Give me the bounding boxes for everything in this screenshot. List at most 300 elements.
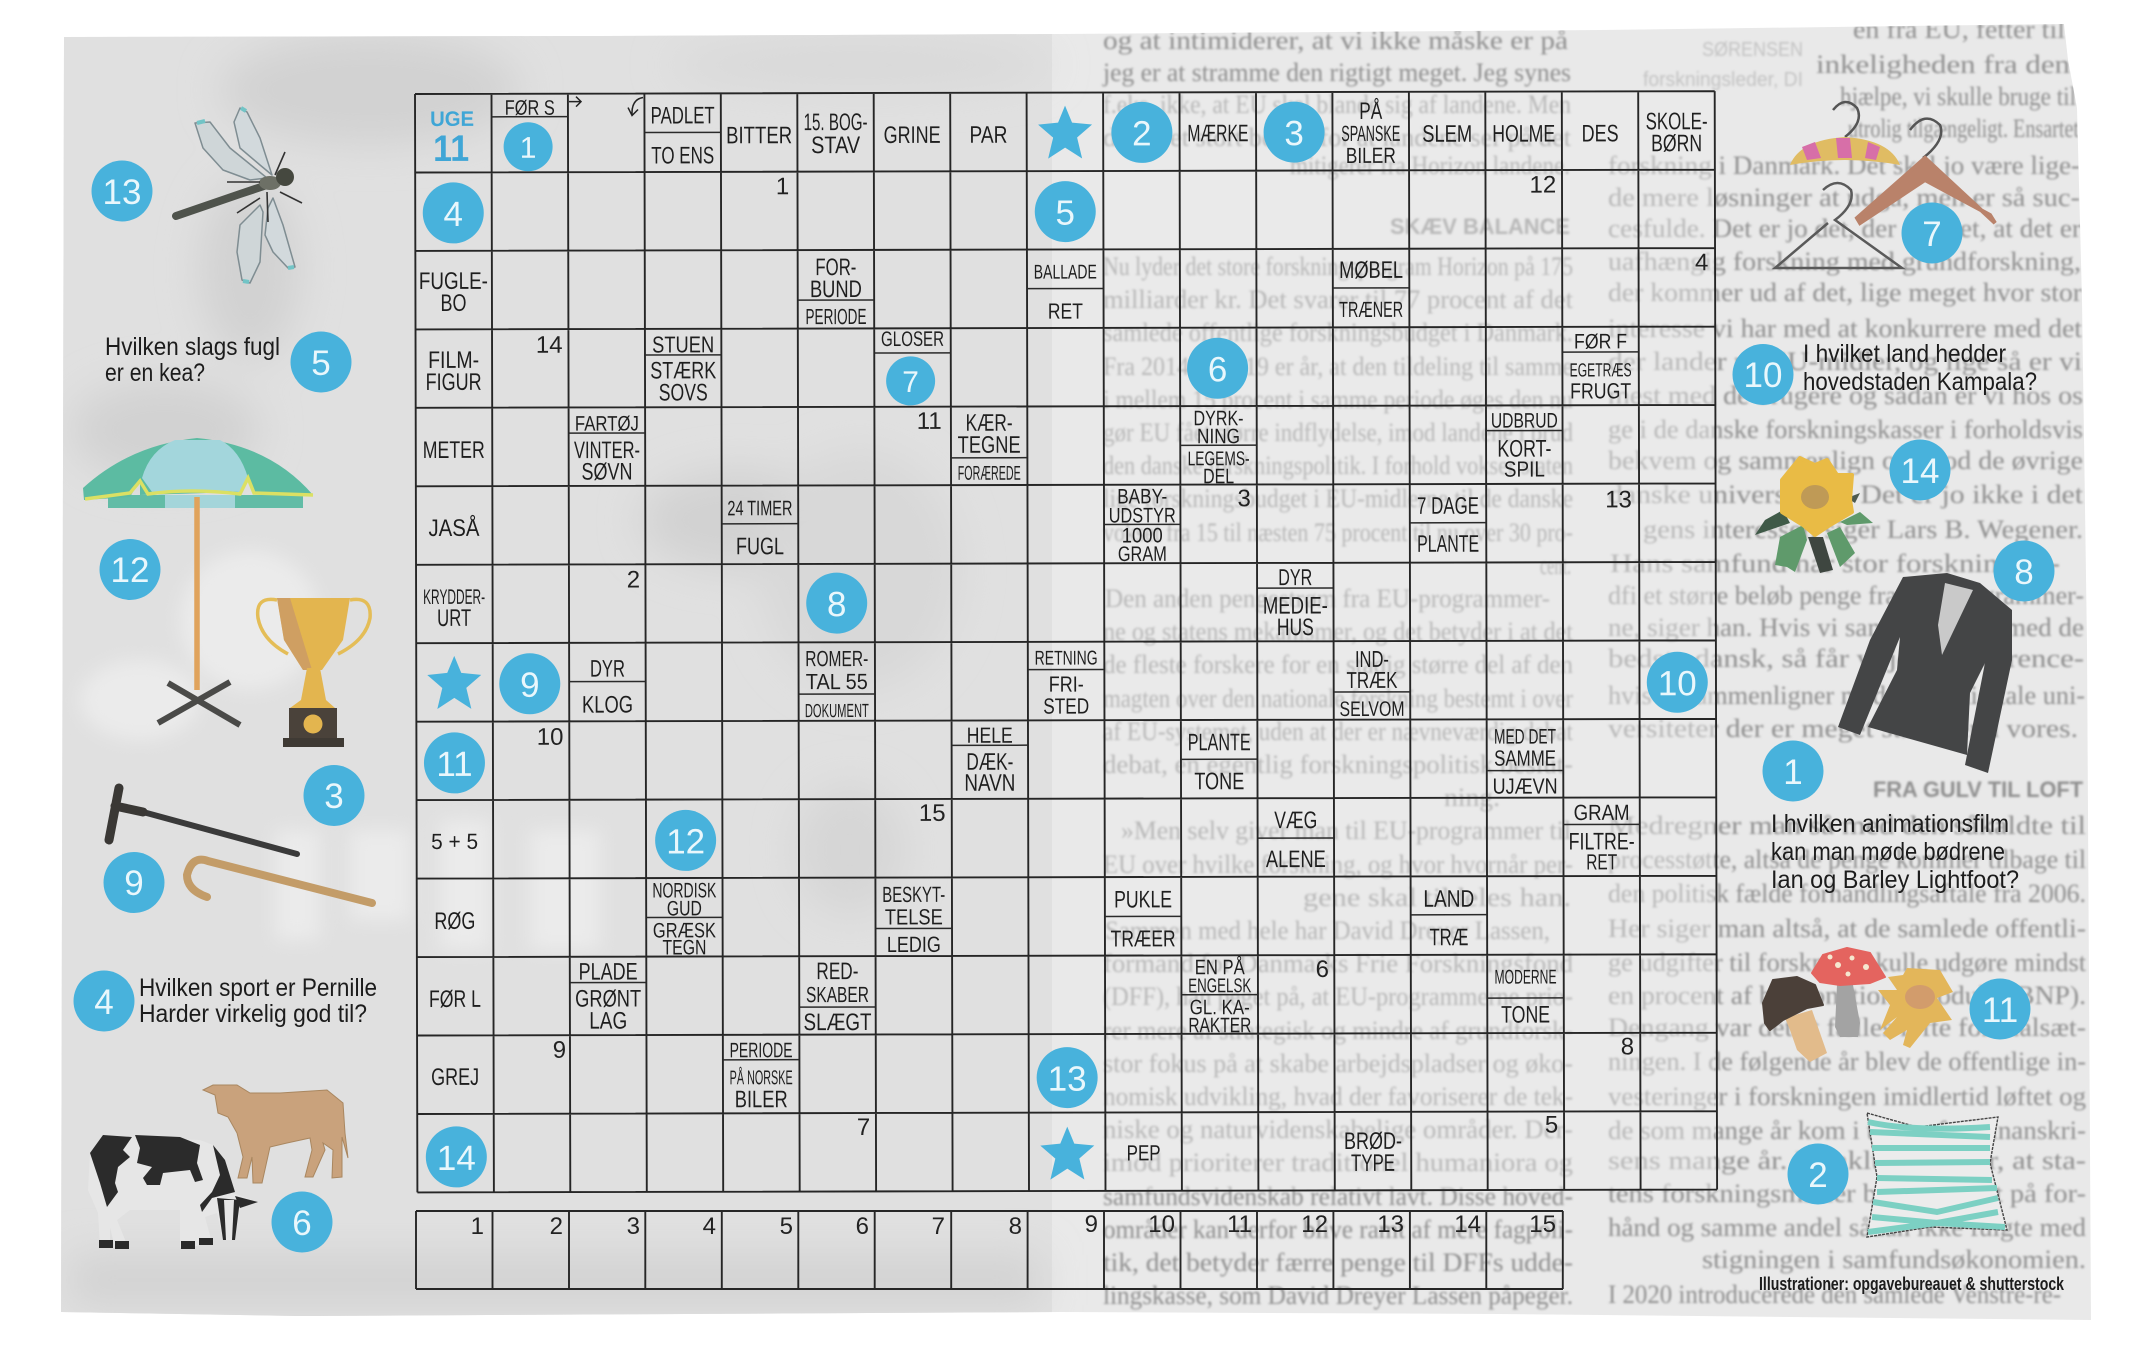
clue cells, left side of grid: BO [440, 290, 466, 317]
question 10: hovedstaden Kampala? [1803, 368, 2037, 396]
clue cells, columns 9 to 12: TRÆK [1346, 667, 1398, 693]
clue cells, columns 9 to 12: IND- [1355, 646, 1389, 672]
clue cells, columns 9 to 12 [1108, 257, 1406, 1177]
number circles, left margin: 6 [292, 1204, 312, 1243]
clue cells, columns 2 to 4: PERIODE [730, 1039, 793, 1062]
newspaper text: right column: versiteter der er meget større end vores. [1608, 714, 2078, 743]
newspaper text: right column: vesteringer i forskningen imidlertid løftet og [1608, 1082, 2086, 1111]
newspaper text: right column: tens forskningsmidler blev fastlagt på for- [1608, 1179, 2086, 1208]
number circles, left margin: 12 [111, 551, 149, 590]
newspaper text: right column: danske universiteter. Det er jo ikke i det [1608, 480, 2084, 509]
clue column header row: HOLME [1492, 121, 1555, 148]
newspaper text: middle column: mitigerer fra Horizon landene. [1290, 151, 1570, 180]
solution letter numbers in grid cells: 5 [1545, 1112, 1558, 1139]
clue cells, columns 5 to 8: LEDIG [887, 932, 941, 957]
newspaper text: middle column: og at intimiderer, at vi ikke måske er på [1103, 26, 1569, 55]
clue cells, columns 13 to 15: UDBRUD [1491, 410, 1558, 433]
clue cells, columns 9 to 12: MEDIE- [1263, 593, 1328, 620]
clue cells, left side of grid: FILM- [428, 347, 479, 374]
clue column header row: GRINE [884, 122, 941, 149]
solution letter numbers in grid cells: 10 [537, 724, 563, 751]
solution strip: 7 [932, 1213, 945, 1240]
translucent wash over newsprint behind the grid [1100, 92, 1714, 1190]
newspaper text: right column: ge udgifter til forskning skulle udgøre mindst [1608, 948, 2087, 977]
clue cells, columns 9 to 12: EN PÅ [1195, 956, 1245, 979]
picture number circles inside grid: 11 [436, 745, 473, 784]
newspaper text: middle column: lige forskningsbudget i EU-midlerne til de danske [1103, 484, 1573, 513]
clue cells, columns 9 to 12: HUS [1277, 614, 1314, 641]
clue cells, columns 9 to 12: ENGELSK [1188, 975, 1252, 997]
clue cells, left side of grid: FØR L [429, 986, 481, 1013]
clue cells, columns 9 to 12: DYRK- [1193, 407, 1244, 430]
clue cells, columns 13 to 15: SPIL [1504, 457, 1545, 482]
solution strip: 14 [1454, 1211, 1481, 1238]
newspaper text: right column: ge i de danske forskningskasser i forholdsvis [1608, 415, 2083, 444]
picture number circles inside grid: 9 [520, 666, 540, 705]
clue cells, columns 9 to 12: DEL [1203, 465, 1234, 488]
newspaper text: right column: gens interesser, siger Lars B. Wegener. [1643, 515, 2083, 544]
number circles, left margin: 5 [311, 344, 331, 383]
clue column header row: SLEM [1422, 121, 1472, 148]
newspaper text: right column: stigningen i samfundsøkonomien. [1702, 1245, 2086, 1274]
clue cells, columns 5 to 8: NAVN [964, 770, 1015, 797]
clue cells, columns 2 to 4: PLADE [579, 959, 638, 986]
clue cells, columns 5 to 8: FOR- [815, 254, 856, 281]
clue cells, columns 5 to 8: BESKYT- [882, 882, 945, 907]
newspaper text: right column: de mere løsninger at udgå, men er så suc- [1608, 183, 2080, 212]
clue cells, columns 5 to 8: KÆR- [966, 410, 1013, 437]
clue cells, left side of grid: FIGUR [426, 369, 482, 396]
solution strip: 11 [1227, 1211, 1252, 1238]
clue cells, columns 13 to 15 [1417, 330, 1635, 1029]
clue cells, columns 9 to 12: RAKTER [1188, 1014, 1251, 1037]
clue cells, columns 5 to 8: TEGNE [958, 432, 1021, 459]
newspaper text: middle column: cent. [1540, 551, 1571, 580]
number circles, right margin: 14 [1901, 452, 1939, 491]
newspaper text: middle column: jeg er at stramme den rigtigt meget. Jeg synes [1102, 58, 1571, 87]
clue cells, columns 13 to 15: SAMME [1494, 746, 1556, 771]
newspaper text: middle column: ning. [1444, 783, 1500, 812]
clue cells, columns 5 to 8: ROMER- [805, 646, 868, 671]
question 5: Hvilken slags fugl [105, 333, 280, 361]
newspaper text: middle column: gør EU fået større indflydelse, imod landene i brud [1103, 418, 1573, 447]
number circles, left margin [74, 160, 364, 1252]
clue cells, columns 13 to 15: PLANTE [1417, 531, 1479, 558]
clue cells, left side of grid: METER [423, 437, 485, 464]
clue cells, columns 5 to 8: PERIODE [805, 304, 867, 329]
icon: clothes hangers [1775, 102, 1995, 268]
clue cells, columns 2 to 4: NORDISK [652, 879, 716, 902]
clue cells, left side of grid: GREJ [431, 1064, 479, 1091]
picture number circles inside grid: 6 [1208, 350, 1227, 389]
week label: UGE 11 [430, 108, 474, 169]
clue column header row: BITTER [726, 122, 792, 149]
clue cells, columns 2 to 4: GUD [667, 897, 702, 920]
number circles, left margin: 13 [103, 173, 141, 212]
solution letter numbers in grid cells: 15 [919, 800, 946, 827]
solution strip: 6 [856, 1213, 869, 1240]
byline box, faint newspaper text [1643, 39, 1803, 91]
picture number circles inside grid: 10 [1658, 664, 1697, 703]
newspaper text: middle column: områder kan derfor blive ramt af mere fagpoli- [1103, 1215, 1573, 1244]
picture number circles inside grid: 8 [827, 585, 846, 624]
newspaper text: right column: processtøtte, altså de penge kommer tilbage til [1608, 845, 2086, 874]
clue cells, columns 9 to 12: BABY- [1117, 485, 1167, 508]
newspaper text: right column: sens mange år. Konklusionen er, at sta- [1608, 1146, 2086, 1175]
byline box, faint newspaper text: forskningsleder, DI [1643, 69, 1803, 91]
newspaper text: middle column: der er et stort behov for at landene ser på det [1103, 123, 1572, 152]
newspaper text: middle column: ne og statens mekanismer, og det betyder i at det [1103, 617, 1574, 646]
week label: UGE 11: UGE [430, 108, 474, 131]
solution letter numbers in grid cells: 13 [1605, 486, 1632, 513]
question 1: Ian og Barley Lightfoot? [1771, 866, 2019, 894]
newspaper text: right column: cesfulde. Det er jo det, der gør det, at det er [1608, 214, 2081, 243]
newspaper text: right column: inkeligheden fra den [1816, 50, 2070, 79]
clue cells, left side of grid: FUGLE- [419, 268, 488, 295]
clue cells, columns 13 to 15: GRAM [1574, 800, 1630, 825]
solution letter numbers in grid cells: 11 [917, 408, 942, 435]
newspaper text: right column: hjælpe, vi skulle bruge til [1840, 82, 2076, 111]
clue column header row: PADLET [651, 102, 715, 129]
clue column header row [505, 94, 1708, 170]
solution strip: 9 [1085, 1211, 1098, 1238]
icon: star, left column [427, 656, 481, 709]
number circles, left margin: 3 [324, 777, 344, 816]
solution letter numbers in grid cells: 9 [553, 1037, 566, 1064]
newspaper text: right column: I 2020 introducerede den samlede Venstre-re- [1608, 1280, 2061, 1309]
clue cells, columns 9 to 12: GRAM [1118, 543, 1167, 566]
clue cells, columns 2 to 4: STUEN [652, 331, 714, 357]
newspaper text: right column: bekvem og sammenlign os imod de øvrige [1608, 446, 2083, 475]
clue cells, columns 13 to 15: KORT- [1497, 436, 1551, 463]
icon: star, bottom row [1040, 1127, 1094, 1180]
newspaper text: right column: FRA GULV TIL LOFT [1873, 777, 2084, 802]
solution letter numbers in grid cells: 8 [1621, 1033, 1634, 1060]
clue cells, columns 2 to 4: LAG [589, 1008, 627, 1035]
newspaper text: middle column: den danske forskningspolitik. I forhold vokser staten [1103, 451, 1573, 480]
clue cells, columns 13 to 15: RET [1586, 849, 1617, 874]
newspaper text: middle column: samfundsvidenskab relativt lavt. Disse hoved- [1103, 1182, 1573, 1211]
picture number circles inside grid: 12 [666, 822, 705, 861]
newspaper text: right column: mest med de brugere og sådan er vi hos os [1608, 381, 2083, 410]
picture number circles inside grid: 1 [520, 132, 536, 165]
solution letter numbers in grid cells: 4 [1695, 249, 1708, 276]
clue cells, columns 9 to 12: GL. KA- [1190, 996, 1250, 1019]
newspaper text: right column: Her siger man altså, at de samlede offentli- [1608, 914, 2086, 943]
newspaper text: right column: der kommer ud af det, lige meget hvor stor [1608, 278, 2082, 307]
newspaper text: right column: der lander på EU-midler, og lige så er vi [1608, 347, 2082, 376]
clue cells, columns 13 to 15: MODERNE [1495, 967, 1557, 989]
newspaper text: middle column: »Men selv giver man til EU-programmer til [1121, 816, 1571, 845]
clue column header row: BILER [1346, 143, 1396, 168]
question 4: Hvilken sport er Pernille [139, 974, 377, 1002]
solution strip: 12 [1301, 1211, 1328, 1238]
newspaper text: right column: ne, siger han. Hvis vi sammenligner med de [1608, 613, 2084, 642]
newspaper text: middle column: gene skal tildeles han. [1303, 883, 1571, 912]
question 1: I hvilken animationsfilm [1771, 810, 2009, 838]
clue column header row: PÅ [1359, 97, 1382, 125]
clue cells, columns 13 to 15: TONE [1501, 1002, 1550, 1029]
solution letter numbers in grid cells [535, 171, 1710, 1142]
clue cells, columns 9 to 12: UDSTYR [1109, 504, 1176, 527]
clue cells, left side of grid: URT [437, 605, 471, 632]
clue cells, left side of grid: RØG [434, 908, 475, 935]
solution strip: 2 [550, 1213, 563, 1240]
newspaper text: right column: interesse vi har med at konkurrere med det [1608, 314, 2083, 343]
clue cells, columns 5 to 8: SKABER [806, 982, 869, 1007]
picture number circles inside grid [423, 101, 1709, 1187]
newspaper text: middle column: rer mere af strategisk og mindre af grundforsk- [1103, 1016, 1573, 1045]
newspaper text: middle column: stor fokus på at skabe arbejdspladser og øko- [1103, 1049, 1573, 1078]
newspaper text: right column: Dengang var det et fælles løfte for målsæt- [1608, 1013, 2086, 1042]
newspaper text: right column: de som mange år kom i uden efter finanskri- [1608, 1116, 2086, 1145]
clue cells, columns 13 to 15: EGETRÆS [1570, 360, 1632, 381]
solution strip: 5 [780, 1213, 793, 1240]
clue cells, columns 2 to 4 [574, 331, 794, 1114]
newspaper text: right column: bedste dansk, så får vi jo konkurrence- [1608, 644, 2084, 673]
newspaper text: right column: forskning i Danmark. Det skal jo være lige- [1608, 151, 2080, 180]
question 10 [1803, 340, 2037, 396]
clue column header row: 15. BOG- [804, 109, 868, 136]
clue column header row: FØR S [505, 97, 555, 120]
newspaper text: middle column [1102, 26, 1574, 1310]
clue cells, columns 5 to 8: FORÆREDE [958, 463, 1021, 485]
newspaper text: middle column: Fra 2014 til 2019 er år, at den tildeling til samme [1103, 352, 1573, 381]
clue cells, columns 2 to 4: PÅ NORSKE [730, 1066, 793, 1089]
icon: mushrooms [1763, 948, 1953, 1062]
clue cells, columns 9 to 12: PLANTE [1188, 729, 1251, 756]
number circles, right margin: 10 [1744, 356, 1782, 395]
newspaper text: middle column: samlede offentlige forskningsbudget i Danmark. [1103, 318, 1573, 347]
clue column header row: STAV [811, 132, 860, 159]
icon: parasol [83, 438, 313, 725]
clue cells, columns 2 to 4: GRØNT [575, 986, 641, 1013]
clue column header row: SPANSKE [1341, 121, 1400, 146]
newspaper text: middle column: (DFF), han peget på, at EU-programmerne prio- [1103, 982, 1573, 1011]
icon: dark blazer [1838, 573, 2012, 773]
crossword grid [415, 91, 1717, 1192]
picture number circles inside grid: 14 [437, 1139, 476, 1178]
solution strip: 10 [1148, 1211, 1175, 1238]
clue cells, columns 9 to 12: VÆG [1274, 807, 1317, 834]
newspaper text: right column: dfi et større beløb penge fra EU-programmer- [1608, 581, 2084, 610]
newspaper text: right column: ningen. I de følgende år blev de offentlige in- [1608, 1047, 2086, 1076]
clue cells, columns 2 to 4: TEGN [662, 936, 706, 959]
number circles, right margin: 7 [1922, 215, 1942, 254]
newspaper text: right column: en fra EU, fetter til [1853, 15, 2065, 44]
clue column header row: TO ENS [651, 142, 714, 169]
newspaper text: middle column: lingskasse, som David Dreyer Lassen påpeger. [1103, 1281, 1573, 1310]
solution strip: 15 [1529, 1211, 1556, 1238]
newspaper text: right column: Hans samfund har stor forskningsin- [1610, 549, 2060, 578]
clue cells, columns 9 to 12: TRÆNER [1339, 297, 1403, 322]
question 1: kan man møde bødrene [1771, 838, 2005, 866]
solution letter numbers in grid cells: 7 [857, 1114, 870, 1141]
solution strip: 3 [627, 1213, 640, 1240]
clue cells, columns 9 to 12: SELVOM [1340, 698, 1405, 721]
newspaper text: middle column: af EU-systemet, uden at der er nævneværdig debat [1103, 717, 1574, 746]
clue cells, columns 5 to 8: RET [1048, 299, 1083, 324]
newspaper text: middle column: f.eks. ikke, at EU skal blande sig af landene. Men [1103, 90, 1571, 119]
solution letter numbers in grid cells: 1 [776, 173, 789, 200]
clue column header row: MÆRKE [1187, 120, 1248, 147]
solution letter numbers in grid cells: 2 [627, 567, 640, 594]
question 4 [139, 974, 377, 1028]
clue cells, columns 5 to 8: DOKUMENT [805, 701, 869, 722]
clue cells, columns 9 to 12: TYPE [1351, 1150, 1395, 1177]
question 10: I hvilket land hedder [1803, 340, 2006, 368]
newspaper text: right column: hvis vi sammenligner med andre digitale uni- [1608, 681, 2085, 710]
clue cells, columns 5 to 8: TAL 55 [806, 669, 868, 694]
newspaper text: middle column: Nu lyder det store forskningsprogram Horizon på 175 [1103, 252, 1573, 281]
question 5 [105, 333, 280, 387]
clue cells, columns 5 to 8: RED- [816, 958, 858, 985]
solution letter numbers in grid cells: 6 [1316, 956, 1329, 983]
clue cells, columns 2 to 4: VINTER- [574, 437, 640, 464]
newspaper text: middle column: milliarder kr. Det svarer til 77 procent af det [1103, 285, 1574, 314]
week label: UGE 11: 11 [433, 128, 469, 169]
newspaper text: middle column: SKÆV BALANCE [1390, 214, 1570, 239]
solution strip: 13 [1377, 1211, 1404, 1238]
clue cells, columns 2 to 4: STÆRK [650, 357, 716, 384]
clue cells, columns 5 to 8: SLÆGT [803, 1009, 872, 1036]
icon: walking sticks [109, 788, 372, 903]
clue cells, columns 9 to 12: TONE [1194, 768, 1244, 795]
clue cells, columns 2 to 4: BILER [735, 1086, 788, 1113]
clue cells, columns 13 to 15: 7 DAGE [1417, 493, 1479, 520]
clue cells, columns 9 to 12: PUKLE [1114, 886, 1172, 913]
solution strip: 4 [703, 1213, 716, 1240]
clue cells, columns 9 to 12: PEP [1127, 1140, 1161, 1165]
newspaper text: right column: uafhængig forskning med grundforskning, [1608, 247, 2081, 276]
question 5: er en kea? [105, 359, 205, 387]
solution letter numbers in grid cells: 12 [1529, 172, 1556, 199]
clue cells, left side of grid [419, 268, 490, 1091]
newspaper text: right column [1608, 15, 2087, 1309]
newspaper text: right column: den politisk fælde forhandlingsaftale fra 2006. [1608, 879, 2086, 908]
clue cells, columns 13 to 15: FILTRE- [1569, 828, 1635, 855]
clue cells, left side of grid: KRYDDER- [423, 586, 485, 609]
clue cells, columns 9 to 12: TRÆER [1111, 925, 1176, 951]
clue cells, left side of grid: 5 + 5 [431, 829, 478, 854]
question 1 [1771, 810, 2019, 894]
newspaper text: right column: Medregner man så med den såkaldte til [1608, 811, 2086, 840]
newspaper text: middle column: Sammen med hele har David Dreyer Lassen, [1105, 916, 1550, 945]
solution strip: 1 [471, 1213, 484, 1240]
number circles, right margin: 8 [2014, 553, 2034, 592]
clue cells, columns 2 to 4: DYR [590, 656, 625, 683]
clue cells, columns 9 to 12: 1000 [1122, 524, 1163, 547]
newspaper text: middle column: tik, det betyder færre penge til DFFs udde- [1103, 1248, 1573, 1277]
newspaper text: middle column: formand for Danmarks Frie Forskningsfond [1103, 949, 1573, 978]
clue column header row: PAR [969, 122, 1008, 149]
clue cells, columns 9 to 12: BRØD- [1344, 1128, 1402, 1155]
newspaper text: middle column: nomisk udvikling, hvad der favoriserer de tek- [1103, 1082, 1573, 1111]
picture number circles inside grid: 2 [1132, 114, 1152, 153]
grid lines [415, 91, 1717, 1192]
clue cells, columns 13 to 15: LAND [1423, 886, 1474, 913]
newspaper text: right column: en procent af bruttonationalprodukt (BNP). [1608, 981, 2086, 1010]
clue column header row: BØRN [1651, 130, 1702, 157]
newspaper text: middle column: magten over den nationale forskning bestemt i over [1103, 684, 1573, 713]
clue cells, columns 5 to 8: GLOSER [881, 328, 944, 351]
number circles, right margin: 1 [1783, 753, 1803, 792]
newspaper text: middle column: de fleste forskere for en stadig større del af den [1103, 650, 1573, 679]
clue cells, columns 5 to 8: BUND [810, 276, 862, 303]
clue cells, columns 9 to 12: DYR [1278, 564, 1312, 590]
icon: yellow flower [1755, 458, 1873, 573]
icon: striped pillow [1867, 1113, 2007, 1237]
picture number circles inside grid: 13 [1048, 1060, 1087, 1099]
clue cells, columns 5 to 8: HELE [967, 723, 1013, 748]
number circles, right margin: 11 [1982, 991, 2018, 1030]
picture number circles inside grid: 4 [443, 195, 463, 234]
icon: cows [88, 1085, 348, 1249]
clue column header row: DES [1582, 120, 1619, 147]
solution letter numbers in grid cells: 3 [1237, 485, 1251, 512]
clue cells, columns 9 to 12: LEGEMS- [1188, 448, 1250, 470]
picture number circles inside grid: 7 [902, 366, 919, 399]
icon: trophy [258, 598, 370, 747]
clue cells, columns 9 to 12: NING [1197, 425, 1240, 448]
number circles, left margin: 9 [124, 864, 144, 903]
clue cells, columns 2 to 4: KLOG [582, 692, 633, 719]
newspaper text: middle column: niske og naturvidenskabelige områder. Der- [1103, 1115, 1573, 1144]
byline box, faint newspaper text: SØRENSEN [1702, 39, 1803, 61]
clue cells, columns 5 to 8: DÆK- [966, 749, 1013, 776]
clue cells, columns 5 to 8: STED [1043, 694, 1089, 719]
newspaper text: middle column: EU over hvilke forskning, og hvor hvornår per- [1103, 850, 1573, 879]
newspaper text: middle column: Den anden pengestrøm fra EU-programmer- [1105, 584, 1550, 613]
number circles, right margin [1732, 202, 2054, 1204]
clue cells, left side of grid: JASÅ [428, 514, 479, 542]
solution strip [416, 1211, 1563, 1289]
clue cells, columns 2 to 4: SØVN [581, 459, 633, 486]
clue cells, columns 13 to 15: TRÆ [1429, 924, 1468, 951]
clue cells, columns 5 to 8: TELSE [885, 904, 943, 929]
solution strip: 8 [1009, 1213, 1022, 1240]
clue cells, columns 2 to 4: FARTØJ [575, 413, 639, 436]
solution letter numbers in grid cells: 14 [536, 332, 563, 359]
clue cells, columns 5 to 8: RETNING [1035, 648, 1098, 670]
newspaper text: middle column: vokset fra 15 til næsten 75 procent til nu over 30 pro- [1103, 518, 1573, 547]
newspaper text: middle column: debat, en egentlig forskningspolitisk beslut- [1103, 750, 1573, 779]
clue cells, columns 13 to 15: FRUGT [1570, 378, 1631, 403]
icon: dragonfly [176, 108, 302, 283]
newspaper text: right column: hånd og samme andel sådan ikke fulgte med [1608, 1213, 2086, 1242]
picture number circles inside grid: 3 [1284, 114, 1304, 153]
number circles, left margin: 4 [94, 983, 114, 1022]
clue cells, columns 2 to 4: 24 TIMER [727, 497, 792, 520]
clue cells, columns 2 to 4: FUGL [736, 533, 784, 560]
clue cells, columns 13 to 15: MED DET [1494, 726, 1556, 749]
clue cells, columns 13 to 15: FØR F [1574, 330, 1627, 353]
clue cells, columns 2 to 4: GRÆSK [653, 919, 716, 942]
question 4: Harder virkelig god til? [139, 1000, 367, 1028]
newspaper text: middle column: i mellem 15 procent i samme periode øges den nu [1103, 385, 1573, 414]
clue cells, columns 5 to 8: BALLADE [1034, 262, 1097, 284]
icon: star, top row [1038, 106, 1092, 159]
clue column header row: SKOLE- [1646, 108, 1708, 135]
clue cells, columns 9 to 12: ALENE [1266, 846, 1326, 873]
clue cells, columns 9 to 12: MØBEL [1339, 257, 1403, 284]
clue cells, columns 2 to 4: SOVS [659, 379, 708, 406]
number circles, right margin: 2 [1808, 1156, 1828, 1195]
icon: direction arrows [569, 97, 643, 116]
picture number circles inside grid: 5 [1055, 194, 1075, 233]
clue cell split lines [492, 114, 1640, 1060]
clue cells, columns 5 to 8: FRI- [1049, 672, 1084, 697]
